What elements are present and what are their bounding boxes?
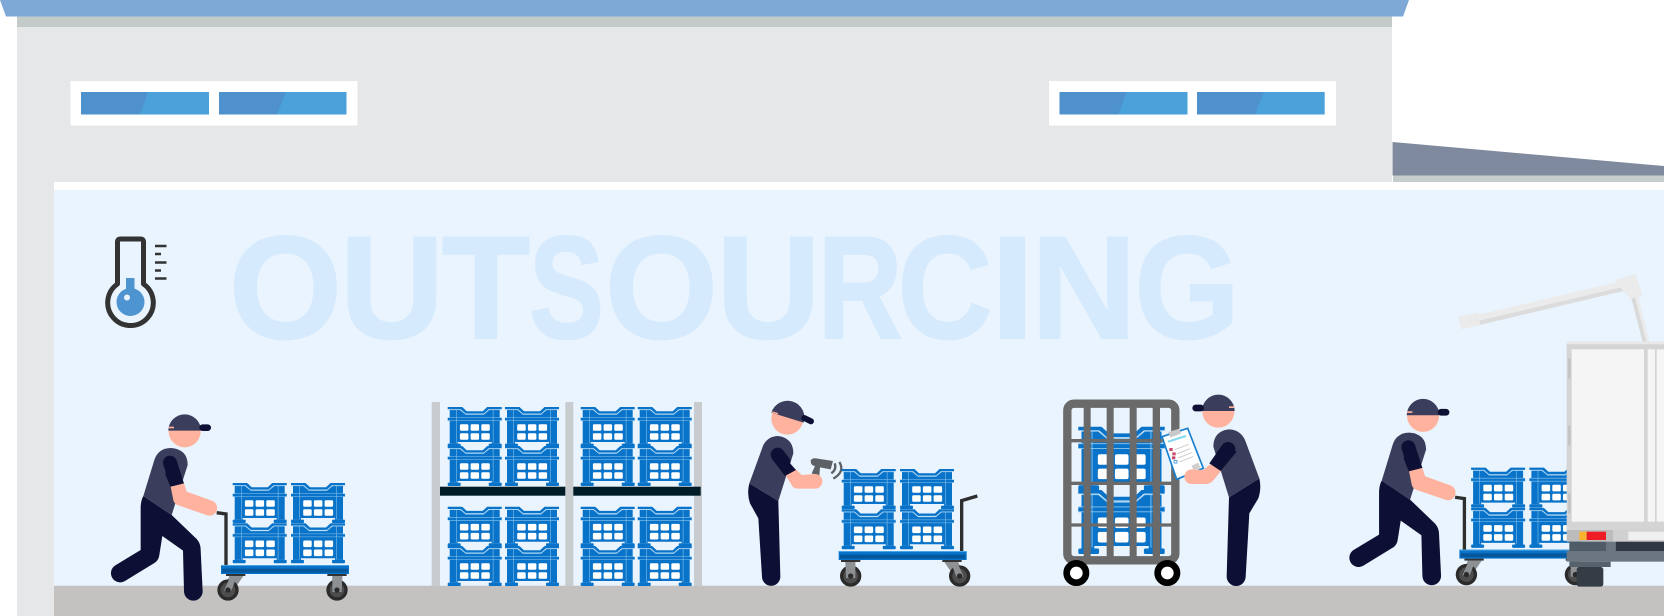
warehouse interior	[54, 190, 1664, 586]
heading: OUTSOURCING background word: G	[1134, 206, 1240, 369]
window right	[1049, 81, 1336, 126]
heading: OUTSOURCING background word: T	[442, 206, 530, 369]
truck with tail lift arm	[1458, 274, 1664, 587]
icon: thermometer	[108, 239, 166, 326]
lift arm	[1458, 274, 1648, 342]
truck box	[1567, 342, 1664, 530]
warehouse wall	[17, 27, 1392, 182]
left wall column	[17, 182, 54, 616]
warehouse roof	[0, 0, 1409, 16]
worker 1 pushing cart	[111, 414, 349, 601]
roof fascia band	[17, 16, 1392, 27]
storage rack with crates	[432, 402, 702, 586]
white lintel strip	[54, 182, 1664, 190]
heading: OUTSOURCING background word: U	[716, 206, 820, 369]
floor	[54, 586, 1664, 616]
worker 2 scanning crates on cart	[748, 401, 977, 587]
heading: OUTSOURCING background word: I	[991, 206, 1034, 369]
heading: OUTSOURCING background word: N	[1031, 206, 1136, 369]
heading: OUTSOURCING background word: R	[818, 206, 902, 369]
annex roof band	[1393, 176, 1664, 182]
heading: OUTSOURCING background word: O	[605, 206, 718, 369]
heading: OUTSOURCING background word: O	[229, 206, 342, 369]
heading: OUTSOURCING background word: U	[340, 206, 444, 369]
icon: clipboard	[1162, 428, 1203, 479]
window left	[70, 81, 358, 126]
annex sloped roof	[1392, 142, 1664, 176]
heading: OUTSOURCING background word: S	[529, 206, 604, 369]
worker 4 pushing cart into truck	[1349, 399, 1587, 585]
worker 3 with clipboard	[1162, 395, 1260, 586]
heading: OUTSOURCING background word: C	[898, 206, 992, 369]
truck rear lights and chassis	[1567, 530, 1664, 587]
roll cage with crates	[1067, 404, 1177, 583]
